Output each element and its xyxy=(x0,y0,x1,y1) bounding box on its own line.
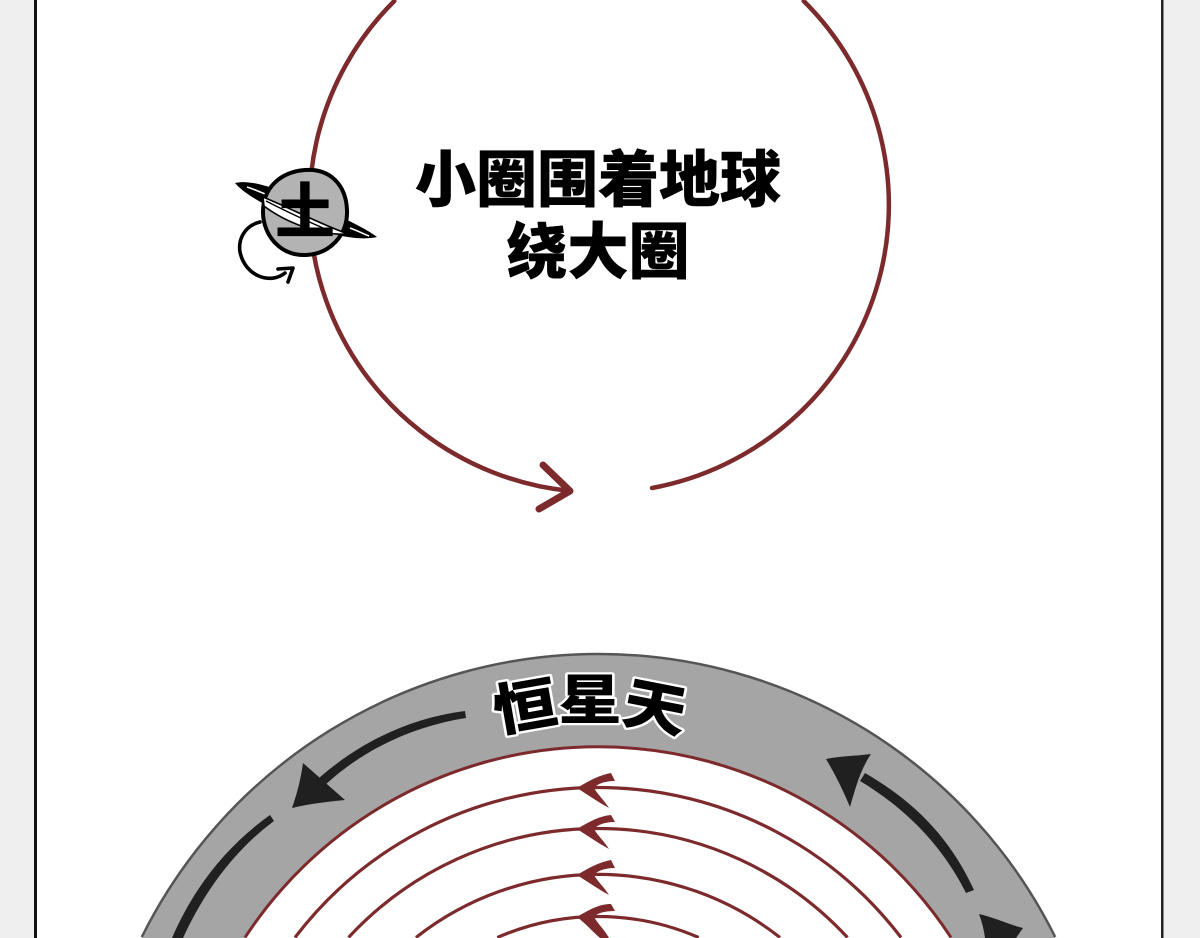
large red circular orbit with arrow xyxy=(310,1,889,509)
black rotation arrows on band xyxy=(172,711,1023,938)
planet label: 土 xyxy=(275,179,335,246)
heading xyxy=(415,146,781,286)
ring front xyxy=(263,197,348,234)
band label: 天 xyxy=(618,672,692,745)
red orbit arrowheads xyxy=(577,773,615,938)
band label: 星 xyxy=(558,670,622,731)
arrow: lower right xyxy=(979,914,1023,938)
band label: 恒 xyxy=(488,671,562,744)
heading: 小圈围着地球 xyxy=(415,146,781,214)
icon: Saturn with ring and rotation arrow xyxy=(235,170,377,282)
band label xyxy=(488,670,692,745)
arrow: upper left xyxy=(292,711,466,808)
arrow: upper right xyxy=(826,754,974,893)
grey celestial sphere band xyxy=(142,654,1055,938)
ring back xyxy=(235,182,377,238)
planet body xyxy=(263,170,347,255)
rotation arrow xyxy=(240,222,293,282)
arrow: lower left xyxy=(172,815,274,938)
heading: 绕大圈 xyxy=(506,218,690,286)
concentric red orbits xyxy=(295,787,901,938)
